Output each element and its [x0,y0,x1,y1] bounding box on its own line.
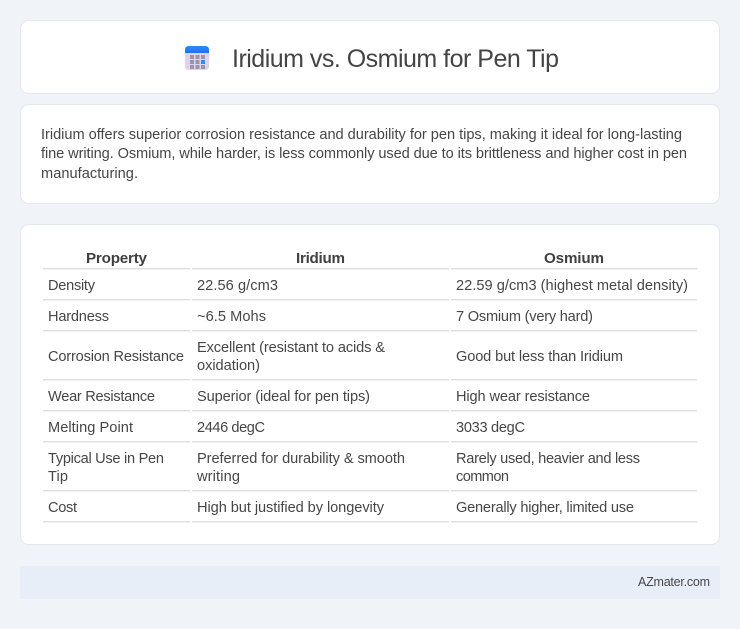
row: cost [48,500,634,516]
table header row [86,250,604,267]
row: corrosion resistance: Excellent (resistant to acids & [197,340,385,356]
row: typical use in pen tip: Preferred for durability & smooth [197,451,405,467]
row: corrosion resistance: oxidation) [197,358,260,374]
row: density [48,278,688,294]
title: Iridium vs. Osmium for Pen Tip [232,45,559,73]
table header row: Iridium [296,250,345,267]
row: corrosion resistance: Corrosion Resistance [48,349,184,365]
footer credit: AZmater.com [638,575,710,589]
table header row: Property [86,250,148,267]
row: cost: Cost [48,500,77,516]
footer bar [20,566,720,599]
panel: comparison table [20,224,720,544]
row: typical use in pen tip: writing [196,469,240,485]
header panel [20,20,720,94]
description text: fine writing. Osmium, while harder, is less commonly used due to its brittleness and higher cost in pen [41,146,687,162]
row: melting point [48,420,525,436]
row: melting point: Melting Point [48,420,133,436]
row: wear resistance: Superior (ideal for pen tips) [197,389,370,405]
row: hardness: ~6.5 Mohs [197,309,266,325]
row: corrosion resistance [48,340,623,374]
row: typical use in pen tip [48,451,640,485]
row: corrosion resistance: Good but less than Iridium [456,349,623,365]
row: wear resistance: Wear Resistance [48,389,155,405]
row: wear resistance: High wear resistance [456,389,590,405]
row: cost: Generally higher, limited use [456,500,634,516]
row: hardness [48,309,593,325]
panel: description [20,104,720,204]
row: typical use in pen tip: common [456,469,509,485]
row: density: 22.56 g/cm3 [197,278,278,294]
icon: calendar [185,46,209,70]
row: hardness: Hardness [48,309,109,325]
table header row: Osmium [544,250,604,267]
row: density: 22.59 g/cm3 (highest metal density) [456,278,688,294]
row: typical use in pen tip: Rarely used, heavier and less [456,451,640,467]
row: density: Density [48,278,96,294]
description text: Iridium offers superior corrosion resistance and durability for pen tips, making it ideal for long-lasting [41,127,682,143]
description text: manufacturing. [41,166,138,182]
row: melting point: 3033 degC [456,420,525,436]
row: melting point: 2446 degC [197,420,265,436]
description text [41,127,687,182]
row: wear resistance [48,389,590,405]
row: typical use in pen tip: Typical Use in Pen [48,451,164,467]
row: hardness: 7 Osmium (very hard) [456,309,593,325]
row: cost: High but justified by longevity [197,500,385,516]
row: typical use in pen tip: Tip [48,469,68,485]
